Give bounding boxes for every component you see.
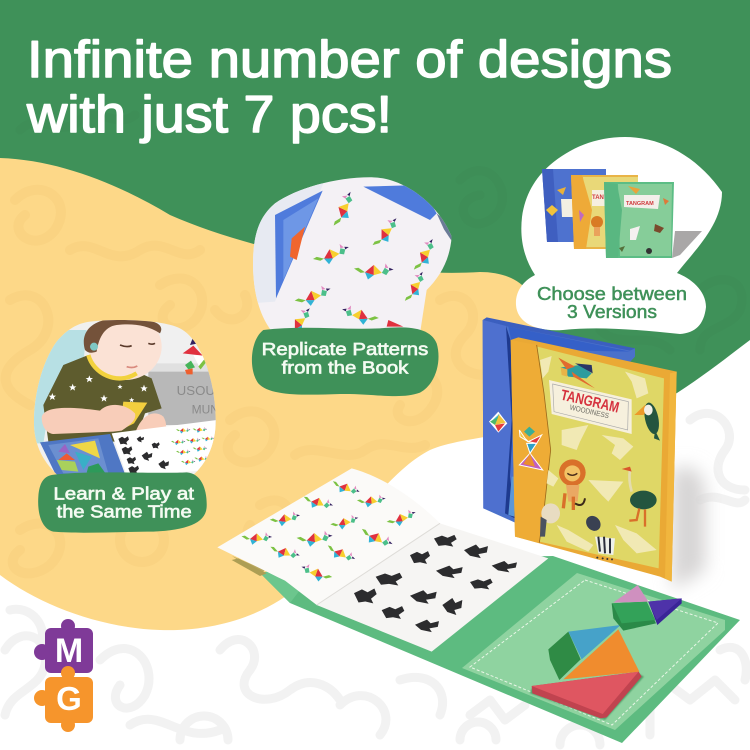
green squiggle pattern <box>20 115 742 350</box>
tangram pieces <box>530 585 682 720</box>
child photo: USOU <box>177 383 215 398</box>
white squiggle pattern <box>5 413 746 745</box>
orange triangle <box>563 629 639 679</box>
callout: learn and play: Learn & Play at <box>53 483 194 503</box>
logo piece: orange <box>34 666 93 732</box>
logo <box>34 619 93 732</box>
title: Infinite number of designs <box>27 31 672 89</box>
black silhouettes <box>354 535 517 632</box>
mini book: green <box>604 182 674 258</box>
dark green parallelogram <box>548 632 581 680</box>
product shadow <box>672 467 705 590</box>
mini book: green: TANGRAM <box>626 201 654 207</box>
yellow squiggle pattern <box>6 190 485 573</box>
title: with just 7 pcs! <box>26 86 392 144</box>
lion <box>559 459 586 510</box>
callout: replicate patterns <box>252 177 452 396</box>
title plate <box>549 380 632 434</box>
callout: replicate patterns: Replicate Patterns <box>262 339 428 359</box>
pattern birds <box>282 189 441 342</box>
blue book tangram icon <box>489 412 507 433</box>
open pattern book <box>217 468 548 652</box>
child photo <box>34 320 216 474</box>
pale tangram silhouettes <box>540 356 657 553</box>
blue triangle <box>568 625 621 659</box>
green folder <box>232 556 740 743</box>
logo letters: G <box>56 680 82 717</box>
logo piece: purple <box>34 619 93 676</box>
callout: choose between 3 versions <box>516 137 722 334</box>
child <box>42 313 166 442</box>
logo letters <box>55 632 83 717</box>
logo letters: M <box>55 632 83 670</box>
label: choose between 3 versions: 3 Versions <box>567 302 657 322</box>
ostrich <box>622 467 657 527</box>
title plate: TANGRAM <box>559 387 621 417</box>
mini book: yellow: TAN <box>592 195 604 201</box>
label: choose between 3 versions: Choose between <box>537 284 687 304</box>
blue board <box>40 434 126 477</box>
toucan <box>634 401 662 441</box>
title plate: WOODINESS <box>569 403 610 420</box>
purple triangle <box>648 598 682 625</box>
white wave area <box>0 340 750 750</box>
left page <box>217 468 440 605</box>
plane <box>558 358 595 388</box>
activity book <box>112 420 217 475</box>
red triangle <box>532 672 642 718</box>
title <box>26 31 672 144</box>
callout: learn and play <box>34 320 216 533</box>
zebra <box>583 513 615 560</box>
hidden lamb at flap <box>540 503 560 537</box>
mini book: blue <box>542 169 606 242</box>
folder inner panel <box>462 573 725 730</box>
callout: learn and play: the Same Time <box>57 501 192 521</box>
label: choose between 3 versions <box>537 284 687 322</box>
label: replicate patterns <box>252 327 439 396</box>
callout: replicate patterns: from the Book <box>282 357 409 377</box>
child photo: MUN <box>192 402 219 416</box>
white blob behind versions <box>516 137 722 334</box>
right page <box>317 523 548 652</box>
tangram figure <box>182 339 206 374</box>
mini book: yellow <box>571 175 638 249</box>
pink triangle <box>613 585 648 603</box>
blue tangram book <box>483 317 635 523</box>
coloured figures <box>241 478 418 585</box>
yellow wave area <box>0 158 540 660</box>
yellow tangram book <box>511 337 677 582</box>
flap tangram figure <box>519 427 543 470</box>
dark green square <box>612 602 656 631</box>
version shadow <box>672 231 702 258</box>
label: learn and play <box>38 472 207 533</box>
pattern photo <box>253 177 452 330</box>
